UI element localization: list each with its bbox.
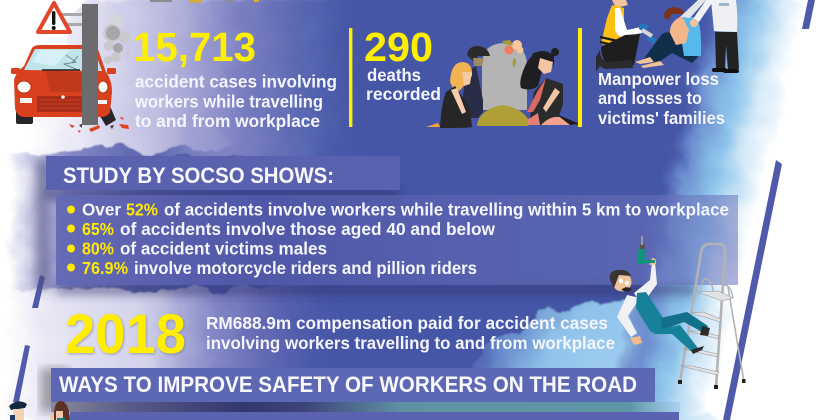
stat: 2018 year: 2018 [66, 303, 187, 366]
heading: ways to improve safety: WAYS TO IMPROVE SAFETY OF WORKERS ON THE ROAD [59, 372, 637, 397]
illustration: first-aider and doctor with injured worker [596, 0, 739, 73]
icon: warning triangle [38, 3, 84, 32]
panel shadows [36, 160, 696, 294]
stat: 15,713 accident cases: to and from workplace [135, 111, 320, 131]
stat: 2018 year: 2018 [65, 302, 186, 365]
stat: 15,713 accident cases: accident cases involving [135, 72, 337, 92]
panel: study findings: 80% [82, 238, 114, 258]
illustration: mourners at gravestone [426, 40, 580, 128]
illustration: woman, cropped [50, 401, 70, 420]
cropped illustration at top edge [150, 0, 259, 2]
panel: study findings: 52% [126, 200, 158, 220]
panel: study findings: 65% [82, 219, 114, 239]
stat: 290 deaths: recorded [366, 84, 441, 104]
panel: study findings: Over [82, 200, 121, 220]
icon: crashed red car against pole [11, 45, 116, 126]
stat: manpower loss: and losses to [598, 88, 702, 108]
panel: study findings: of accidents involve those aged 40 and below [120, 219, 495, 239]
panel: study findings: of accidents involve workers while travelling within 5 km to workplace [164, 200, 729, 220]
stat: 15,713 accident cases: workers while travelling [134, 92, 323, 112]
heading: study by SOCSO [46, 156, 400, 190]
stat: 290 deaths [364, 24, 441, 104]
divider: right yellow line [578, 28, 582, 127]
panel: study findings: of accident victims males [120, 238, 327, 258]
panel: safety measures, cropped at the bottom edge [70, 412, 679, 420]
illustration: worker falling from ladder with drill [610, 236, 710, 354]
stat: manpower loss [598, 69, 725, 128]
panel: study findings: 76.9% [82, 258, 128, 278]
stat: 15,713 accident cases: 15,713 [133, 24, 256, 70]
text: compensation paid [206, 313, 615, 353]
divider: left yellow line [349, 28, 352, 127]
text: compensation paid: RM688.9m compensation paid for accident cases [206, 313, 608, 333]
stat: 290 deaths: 290 [364, 24, 433, 70]
stat: manpower loss: victims' families [598, 108, 725, 128]
band shadow [40, 368, 680, 412]
icon: grey pole [82, 4, 98, 125]
illustration: police officer, cropped [9, 401, 27, 420]
stat: 15,713 accident cases [133, 24, 337, 131]
panel: study findings [56, 195, 738, 285]
crash debris [69, 117, 129, 133]
panel: study findings: involve motorcycle riders and pillion riders [134, 258, 477, 278]
heading: study by SOCSO: STUDY BY SOCSO SHOWS: [63, 163, 334, 188]
illustration: ladder [678, 244, 746, 389]
stat: manpower loss: Manpower loss [598, 69, 719, 89]
smoke cloud [103, 14, 130, 64]
stat: 290 deaths: deaths [367, 65, 421, 85]
text: compensation paid: involving workers travelling to and from workplace [206, 333, 615, 353]
